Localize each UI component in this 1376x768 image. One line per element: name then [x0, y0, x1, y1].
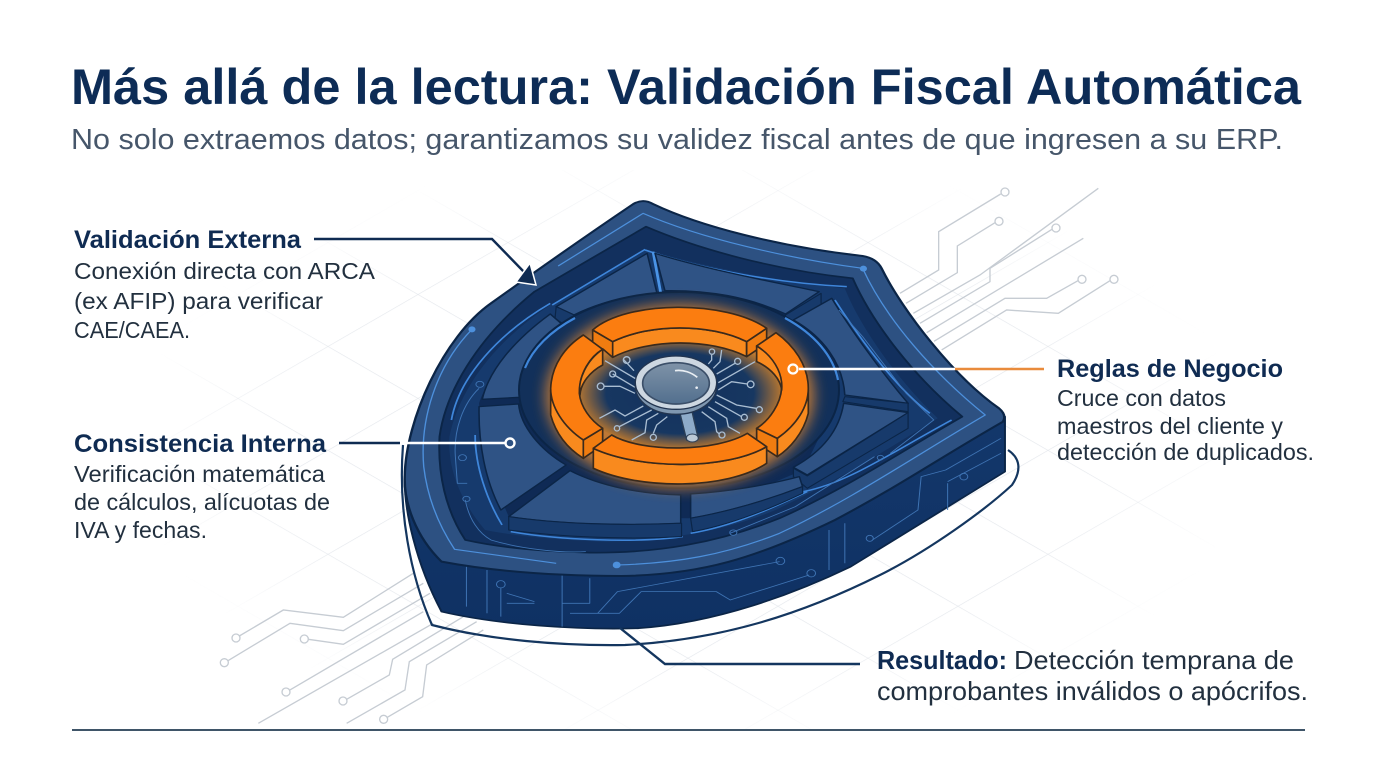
text: Validación Externa body: CAE/CAEA. [74, 317, 190, 343]
text: Reglas de Negocio body: Cruce con datos [1057, 385, 1226, 411]
channel details [455, 310, 934, 552]
orange ring segments [551, 307, 808, 484]
text: Validación Externa body: (ex AFIP) para verificar [74, 288, 323, 314]
heading: Reglas de Negocio: Reglas de Negocio [1057, 355, 1283, 383]
recessed channel [439, 227, 962, 553]
callout: Consistencia Interna [74, 430, 514, 543]
connector: Consistencia Interna [339, 438, 514, 448]
plate: lower right [793, 403, 908, 475]
text: Consistencia Interna body: de cálculos, alícuotas de [74, 489, 330, 515]
circuit traces: lower left [220, 573, 483, 723]
text: Reglas de Negocio body: detección de duplicados. [1057, 439, 1314, 465]
ring core [577, 337, 783, 449]
magnifier and circuit icon [597, 349, 762, 442]
shield illustration [405, 201, 1005, 629]
connector: Resultado [620, 628, 860, 664]
inner plate dark base [479, 290, 838, 518]
plate: left [479, 404, 566, 510]
heading: Consistencia Interna: Consistencia Interna [74, 430, 327, 458]
callout: Validación Externa [74, 226, 536, 343]
shield side wall [405, 323, 1005, 629]
heading: Validación Externa: Validación Externa [74, 226, 302, 254]
plate: bottom right [691, 477, 803, 518]
central well [519, 292, 839, 488]
ring segment: right [757, 333, 808, 457]
ring segment: left [551, 335, 603, 458]
callout: Reglas de Negocio [788, 355, 1314, 465]
outline curve around the shield [402, 445, 1018, 645]
plate: upper left [482, 314, 564, 399]
subtitle: No solo extraemos datos; garantizamos su validez fiscal antes de que ingresen a su ERP. [71, 124, 1283, 156]
text: Resultado: Detección temprana de [1014, 645, 1294, 675]
plate: bottom left [509, 471, 681, 524]
text: Reglas de Negocio body: maestros del cliente y [1057, 413, 1284, 439]
text: Resultado: comprobantes inválidos o apócrifos. [877, 676, 1308, 706]
plate: top left [556, 253, 657, 315]
text: Consistencia Interna body: IVA y fechas. [74, 517, 207, 543]
connector: Reglas de Negocio [788, 364, 1044, 374]
plate: top right [655, 253, 819, 314]
shield side circuit details [466, 438, 1001, 627]
circuit traces: upper right [900, 188, 1118, 350]
text: Validación Externa body: Conexión directa con ARCA [74, 258, 376, 284]
ring segment: top [593, 307, 767, 357]
ring segment: bottom [593, 433, 767, 484]
callout: Resultado [620, 628, 1308, 706]
text: Consistencia Interna body: Verificación matemática [74, 461, 325, 487]
text: Resultado: Resultado: [877, 645, 1007, 675]
shield top face [405, 201, 1004, 576]
top face light traces [423, 213, 985, 565]
channel floor [449, 250, 938, 542]
arrow: Validación Externa [314, 239, 536, 285]
plate: right [793, 298, 908, 403]
title: Más allá de la lectura: Validación Fiscal Automática [71, 59, 1302, 115]
